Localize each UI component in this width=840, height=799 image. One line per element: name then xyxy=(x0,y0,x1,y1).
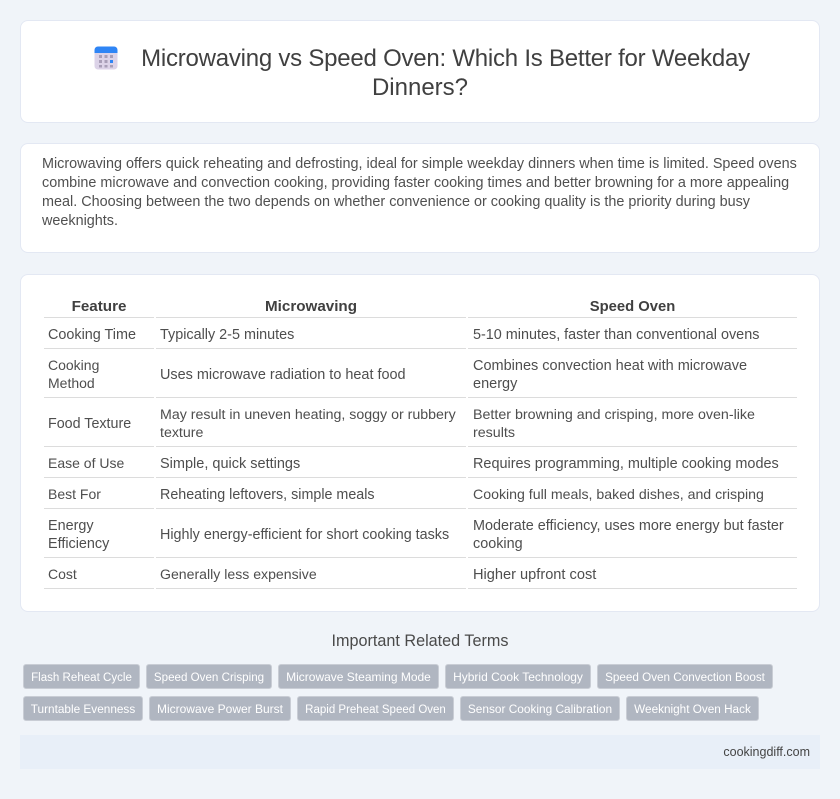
comparison table: Cooking full meals, baked dishes, and crisping xyxy=(473,486,764,502)
intro text: Microwaving offers quick reheating and defrosting, ideal for simple weekday dinners when time is limited. Speed ovens xyxy=(42,156,797,172)
comparison table: cooking xyxy=(473,536,523,552)
title: Dinners? xyxy=(372,74,468,101)
comparison table: energy xyxy=(473,376,517,392)
comparison table: Cost xyxy=(48,566,77,582)
intro text: weeknights. xyxy=(42,213,118,229)
footer xyxy=(20,735,820,769)
related term tags xyxy=(23,664,773,721)
related term tags: Sensor Cooking Calibration xyxy=(468,702,612,716)
related term tags: Microwave Power Burst xyxy=(157,702,283,716)
comparison table: Energy xyxy=(48,518,94,534)
title xyxy=(141,45,750,101)
intro text: meal. Choosing between the two depends on whether convenience or cooking quality is the priority during busy xyxy=(42,194,750,210)
comparison table: 5-10 minutes, faster than conventional ovens xyxy=(473,327,759,343)
icon: calendar xyxy=(94,46,118,70)
comparison table: Generally less expensive xyxy=(160,566,317,582)
comparison table: Best For xyxy=(48,486,101,502)
comparison table: Typically 2-5 minutes xyxy=(160,327,294,343)
comparison table: Requires programming, multiple cooking modes xyxy=(473,456,779,472)
comparison table: Combines convection heat with microwave xyxy=(473,358,747,374)
comparison table: Cooking xyxy=(48,357,99,373)
comparison table: Simple, quick settings xyxy=(160,456,300,472)
panel: title card xyxy=(20,20,820,123)
comparison table: Uses microwave radiation to heat food xyxy=(160,367,406,383)
comparison table: Food Texture xyxy=(48,416,131,432)
related terms heading: Important Related Terms xyxy=(332,632,508,650)
panel: comparison table card xyxy=(20,274,820,612)
related term tags: Speed Oven Crisping xyxy=(154,671,264,684)
comparison table: May result in uneven heating, soggy or rubbery xyxy=(160,407,456,423)
panel: intro card xyxy=(20,143,820,253)
footer source: cookingdiff.com xyxy=(723,745,810,759)
related term tags: Microwave Steaming Mode xyxy=(286,670,431,684)
comparison table: Method xyxy=(48,375,95,391)
intro text: combine microwave and convection cooking, providing faster cooking times and better browning for a more appealing xyxy=(42,175,789,191)
comparison table: Reheating leftovers, simple meals xyxy=(160,487,375,503)
related term tags: Rapid Preheat Speed Oven xyxy=(305,704,446,716)
comparison table: results xyxy=(473,425,515,441)
comparison table xyxy=(44,298,797,589)
comparison table: Moderate efficiency, uses more energy but faster xyxy=(473,518,784,534)
related term tags: Turntable Evenness xyxy=(31,702,135,716)
title: Microwaving vs Speed Oven: Which Is Better for Weekday xyxy=(141,45,750,72)
comparison table: Ease of Use xyxy=(48,455,124,471)
comparison table: Cooking Time xyxy=(48,327,136,343)
comparison table: Highly energy-efficient for short cooking tasks xyxy=(160,527,449,543)
comparison table: Feature xyxy=(72,298,126,315)
comparison table: Microwaving xyxy=(265,298,357,315)
related term tags: Hybrid Cook Technology xyxy=(453,670,583,684)
comparison table: Efficiency xyxy=(48,536,109,552)
comparison table: texture xyxy=(160,425,203,441)
intro text xyxy=(42,156,797,229)
comparison table: Speed Oven xyxy=(590,299,675,315)
related term tags: Flash Reheat Cycle xyxy=(31,672,132,684)
related term tags: Speed Oven Convection Boost xyxy=(605,671,765,684)
comparison table: Better browning and crisping, more oven-like xyxy=(473,407,755,423)
related term tags: Weeknight Oven Hack xyxy=(634,703,751,716)
comparison table: Higher upfront cost xyxy=(473,567,596,583)
